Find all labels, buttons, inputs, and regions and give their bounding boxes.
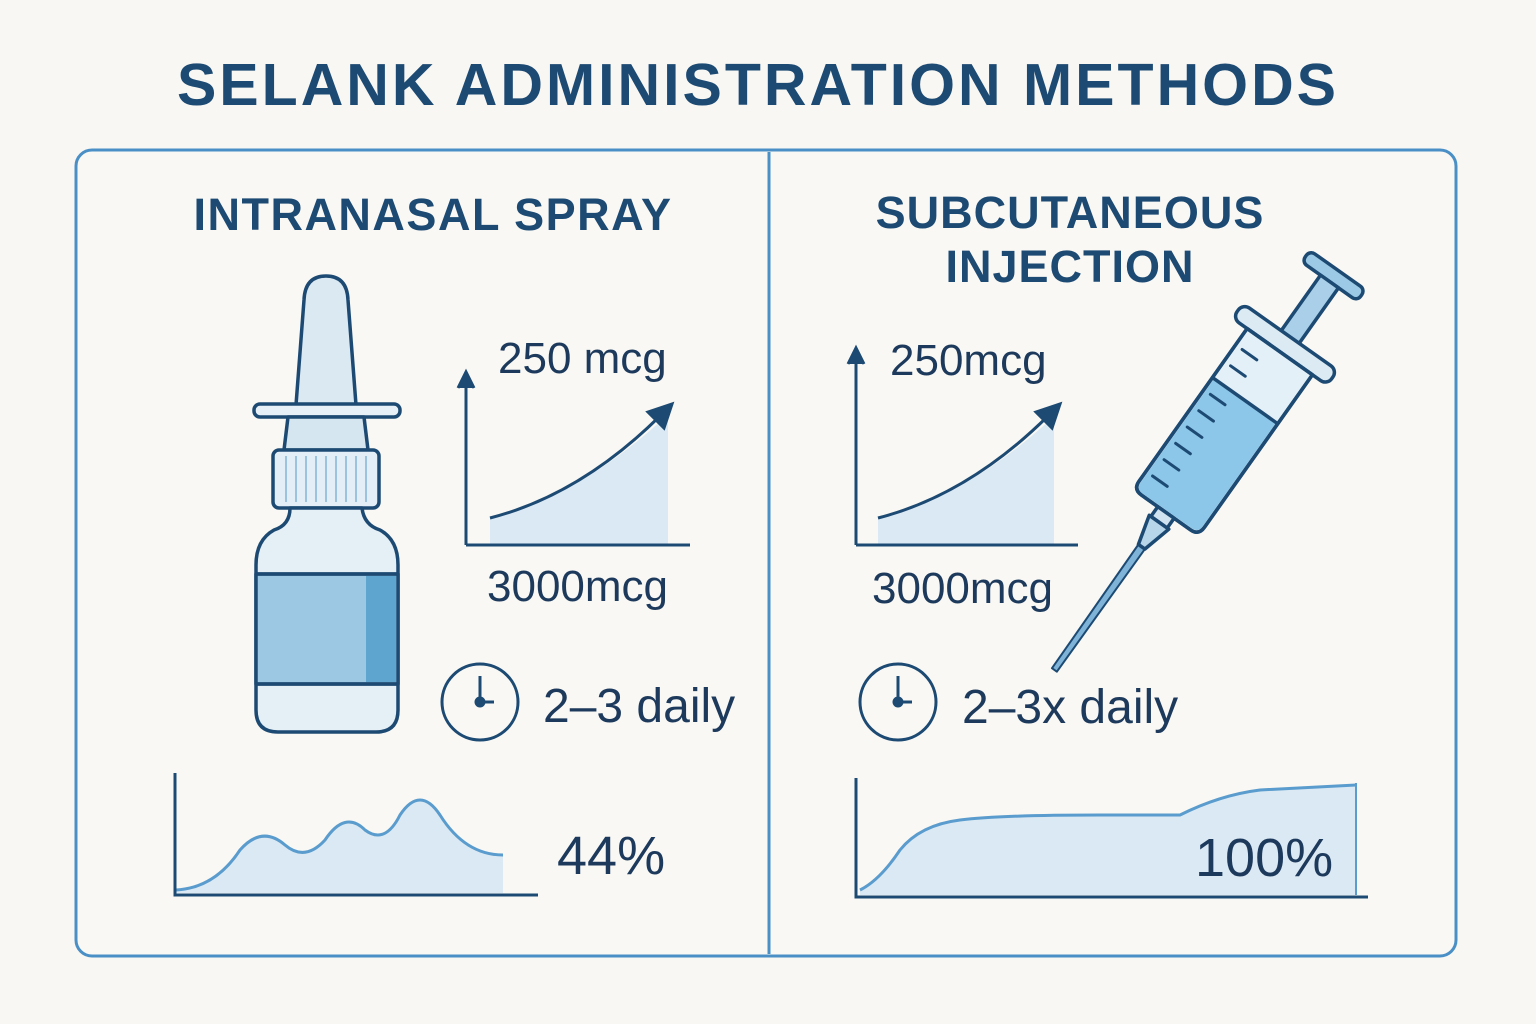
label: 3000 mcg left: 3000mcg [487,562,668,611]
chart: dose curve right [848,348,1078,545]
icon: clock left [442,664,518,740]
label: 44%: 44% [557,826,665,886]
label: 3000 mcg right: 3000mcg [872,564,1053,613]
panel: intranasal spray [175,189,735,895]
title: SELANK ADMINISTRATION METHODS [177,52,1339,118]
label: 250 mcg left: 250 mcg [498,334,667,383]
heading: intranasal: INTRANASAL SPRAY [193,189,673,240]
chart: bioavailability right [856,778,1368,897]
heading: subcutaneous: SUBCUTANEOUS [876,187,1264,238]
panel: subcutaneous injection [848,187,1385,897]
panel frame [76,150,1456,956]
icon: clock right [860,664,936,740]
label: 250 mcg right: 250mcg [890,336,1047,385]
icon: nasal spray bottle [254,276,400,732]
chart: dose curve left [458,372,690,545]
label: 100%: 100% [1195,828,1333,888]
chart: bioavailability left [175,773,538,895]
heading: subcutaneous: INJECTION [945,241,1195,292]
label: dosing frequency right: 2–3x daily [962,681,1178,734]
icon: syringe [1007,237,1385,703]
label: dosing frequency left: 2–3 daily [543,680,735,733]
